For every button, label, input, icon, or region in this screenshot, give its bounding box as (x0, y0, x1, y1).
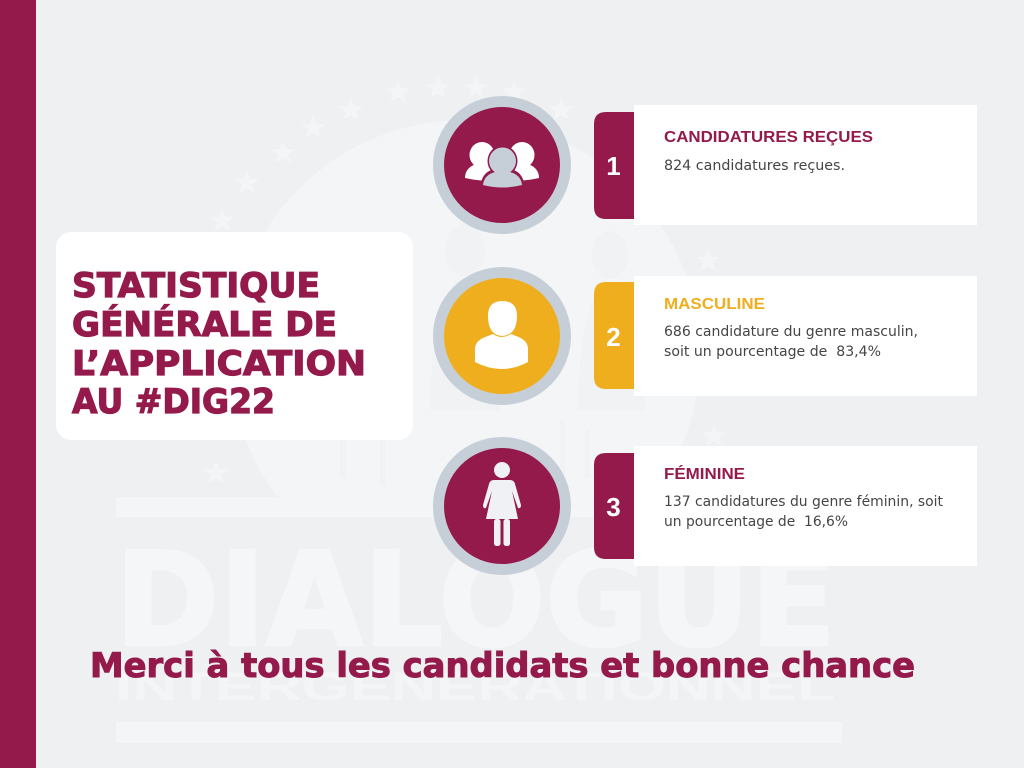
title: L’APPLICATION (72, 344, 366, 384)
number tab 1: 1 (606, 151, 621, 181)
heading: féminine: FÉMININE (664, 464, 745, 483)
icon: male person (433, 267, 571, 405)
panel: candidatures reçues (594, 105, 977, 225)
title (72, 266, 366, 422)
text: masculine statistic: soit un pourcentage de 83,4% (664, 344, 881, 360)
number tab 3 (594, 453, 634, 559)
text: 824 candidatures: 824 candidatures reçues. (664, 158, 845, 174)
number tab 2 (594, 282, 634, 389)
background watermark: Dialogue Intergénérationnel logo (115, 76, 842, 743)
background watermark: Dialogue Intergénérationnel logo: DIALOGUE (115, 524, 836, 676)
title: AU #DIG22 (72, 382, 275, 422)
background watermark: Dialogue Intergénérationnel logo: INTERGENERATIONNEL (115, 665, 835, 709)
number tab 1 (594, 112, 634, 219)
title: GÉNÉRALE DE (72, 304, 337, 345)
left sidebar (0, 0, 36, 768)
heading: masculine: MASCULINE (664, 296, 765, 313)
icon: female person (433, 437, 571, 575)
text: féminine statistic: un pourcentage de 16,6% (664, 514, 848, 530)
heading: candidatures reçues: CANDIDATURES REÇUES (664, 129, 873, 146)
text: masculine statistic (664, 324, 918, 360)
text: féminine statistic (664, 494, 944, 530)
title: STATISTIQUE (72, 266, 320, 306)
text: masculine statistic: 686 candidature du genre masculin, (664, 324, 918, 340)
panel: masculine (594, 276, 977, 396)
text: féminine statistic: 137 candidatures du genre féminin, soit (664, 494, 944, 510)
panel: title (56, 232, 413, 440)
number tab 2: 2 (606, 322, 621, 352)
icon: group of candidates (433, 96, 571, 234)
panel: féminine (594, 446, 977, 566)
number tab 3: 3 (606, 492, 621, 522)
closing message: Merci à tous les candidats et bonne chance (90, 646, 915, 686)
